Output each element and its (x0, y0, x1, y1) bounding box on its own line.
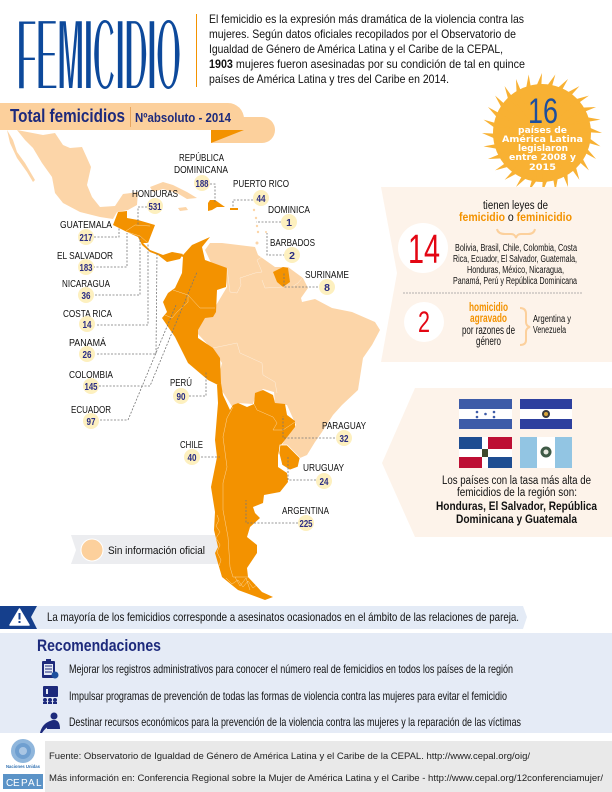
banner: total femicidios (0, 103, 275, 143)
intro text: países de América Latina y tres del Caribe en 2014. (209, 72, 449, 86)
logo: CEPAL (3, 774, 43, 789)
country labels: 2 (289, 250, 295, 262)
text: aggravated homicide: homicidio (469, 302, 508, 314)
list: countries (453, 243, 577, 287)
country labels: 183 (80, 262, 93, 274)
heading: recommendations: Recomendaciones (37, 636, 161, 655)
text: aggravated homicide: por razones de (462, 325, 515, 337)
footer: Fuente: Observatorio de Igualdad de Género de América Latina y el Caribe de la CEPAL. http://www.cepal.org/oig/ (49, 751, 530, 762)
country labels: PUERTO RICO (233, 178, 289, 190)
intro text: Igualdad de Género de América Latina y el Caribe de la CEPAL, (209, 42, 503, 56)
legend: no official information (71, 535, 220, 564)
circle: 14 (398, 223, 448, 273)
brace: top (497, 229, 535, 238)
flag: Honduras (459, 399, 512, 429)
country labels: 531 (148, 201, 162, 213)
country labels: PARAGUAY (322, 420, 366, 432)
country labels: PERÚ (170, 376, 192, 389)
text: highest rate: Dominicana y Guatemala (456, 514, 578, 526)
intro text: mujeres. Según datos oficiales recopilados por el Observatorio de (209, 27, 516, 41)
country labels: 97 (86, 416, 96, 428)
country labels: DOMINICANA (174, 164, 228, 176)
country labels: 36 (82, 290, 91, 302)
circle: 2: 2 (418, 306, 430, 339)
flag: El Salvador (520, 399, 572, 429)
country labels: COSTA RICA (63, 308, 112, 320)
text: highest rate (436, 475, 598, 526)
flag: Dominican Republic (459, 437, 512, 468)
circle: 14: 14 (408, 226, 440, 272)
logo: United Nations: Naciones Unidas (6, 764, 40, 769)
country labels: 90 (176, 391, 186, 403)
country labels: GUATEMALA (60, 219, 112, 231)
map of Latin America (7, 130, 380, 600)
country labels: 40 (188, 452, 197, 464)
map: countries with data (113, 200, 300, 600)
text: aggravated homicide (462, 302, 515, 348)
country labels: COLOMBIA (69, 369, 113, 381)
country labels: 44 (256, 193, 266, 205)
footer: Más información en: Conferencia Regional sobre la Mujer de América Latina y el Caribe - http://www.cepal.org/12conferenciamujer/ (49, 773, 603, 784)
heading: laws: femicidio o feminicidio (459, 212, 572, 224)
country labels: REPÚBLICA (179, 151, 224, 164)
text: Argentina and Venezuela (533, 314, 571, 336)
country labels: EL SALVADOR (57, 250, 113, 262)
connector lines (93, 184, 335, 523)
heading: laws (459, 200, 572, 224)
intro text: El femicidio es la expresión más dramática de la violencia contra las (209, 12, 524, 26)
banner: total femicidios: Total femicidios (10, 106, 125, 126)
text: Argentina and Venezuela: Venezuela (533, 325, 566, 336)
country labels: 1 (286, 217, 292, 229)
logo: CEPAL: CEPAL (6, 778, 42, 789)
alert banner: La mayoría de los femicidios corresponde a asesinatos ocasionados en el ámbito de las relaciones de pareja. (47, 610, 519, 624)
country labels: 188 (196, 178, 209, 190)
starburst: 16 countries: América Latina (502, 134, 583, 145)
banner: total femicidios: Nºabsoluto - 2014 (135, 110, 232, 125)
text: Argentina and Venezuela: Argentina y (533, 314, 571, 325)
country labels: 26 (82, 349, 92, 361)
country labels (57, 151, 366, 531)
heading: laws: tienen leyes de (483, 200, 548, 212)
country labels: 14 (82, 319, 92, 331)
legend: no official information: Sin información oficial (108, 545, 205, 557)
starburst: 16 countries: 16 (528, 92, 558, 131)
text: highest rate: femicidios de la región son: (457, 487, 577, 499)
country labels: 217 (80, 232, 93, 244)
country labels: NICARAGUA (62, 278, 110, 290)
country labels: 225 (300, 518, 313, 530)
icon: warning (10, 609, 29, 625)
country labels: 145 (84, 381, 98, 393)
country labels: ECUADOR (71, 404, 111, 416)
logo: United Nations (6, 739, 40, 769)
country labels: CHILE (180, 439, 203, 451)
footer (45, 741, 612, 792)
country labels: DOMINICA (268, 204, 310, 216)
panel: highest rate countries (382, 388, 612, 537)
country labels: 32 (340, 433, 349, 445)
country labels: PANAMÁ (69, 336, 106, 349)
country labels: ARGENTINA (282, 505, 329, 517)
country labels: 24 (320, 476, 329, 488)
country labels: HONDURAS (132, 188, 178, 200)
intro text: 1903 mujeres fueron asesinadas por su condición de tal en quince (209, 57, 525, 71)
intro text (209, 12, 525, 86)
starburst: 16 countries: entre 2008 y (509, 153, 576, 163)
starburst: 16 countries (482, 73, 602, 193)
list: countries: Honduras, México, Nicaragua, (467, 265, 564, 276)
country labels: 8 (324, 282, 330, 294)
brace: right (520, 308, 530, 345)
title divider (196, 14, 197, 87)
panel: legislation (381, 187, 612, 362)
text: aggravated homicide: agravado (470, 313, 507, 325)
starburst: 16 countries: países de (518, 126, 567, 136)
country labels: URUGUAY (303, 462, 344, 474)
country labels: BARBADOS (270, 237, 315, 249)
icon: people (40, 712, 60, 733)
circle: 2 (404, 302, 444, 342)
panel: recommendations (0, 633, 612, 733)
text: aggravated homicide: género (476, 336, 501, 348)
icon: training (43, 686, 58, 704)
alert banner (0, 606, 527, 629)
country labels: SURINAME (305, 269, 349, 281)
starburst: 16 countries: legislaron (518, 144, 568, 154)
icon: clipboard (42, 659, 58, 678)
starburst: 16 countries: 2015 (529, 163, 556, 173)
flag: Guatemala (520, 437, 572, 468)
map: borders (126, 225, 303, 590)
map: no data countries (7, 130, 380, 458)
